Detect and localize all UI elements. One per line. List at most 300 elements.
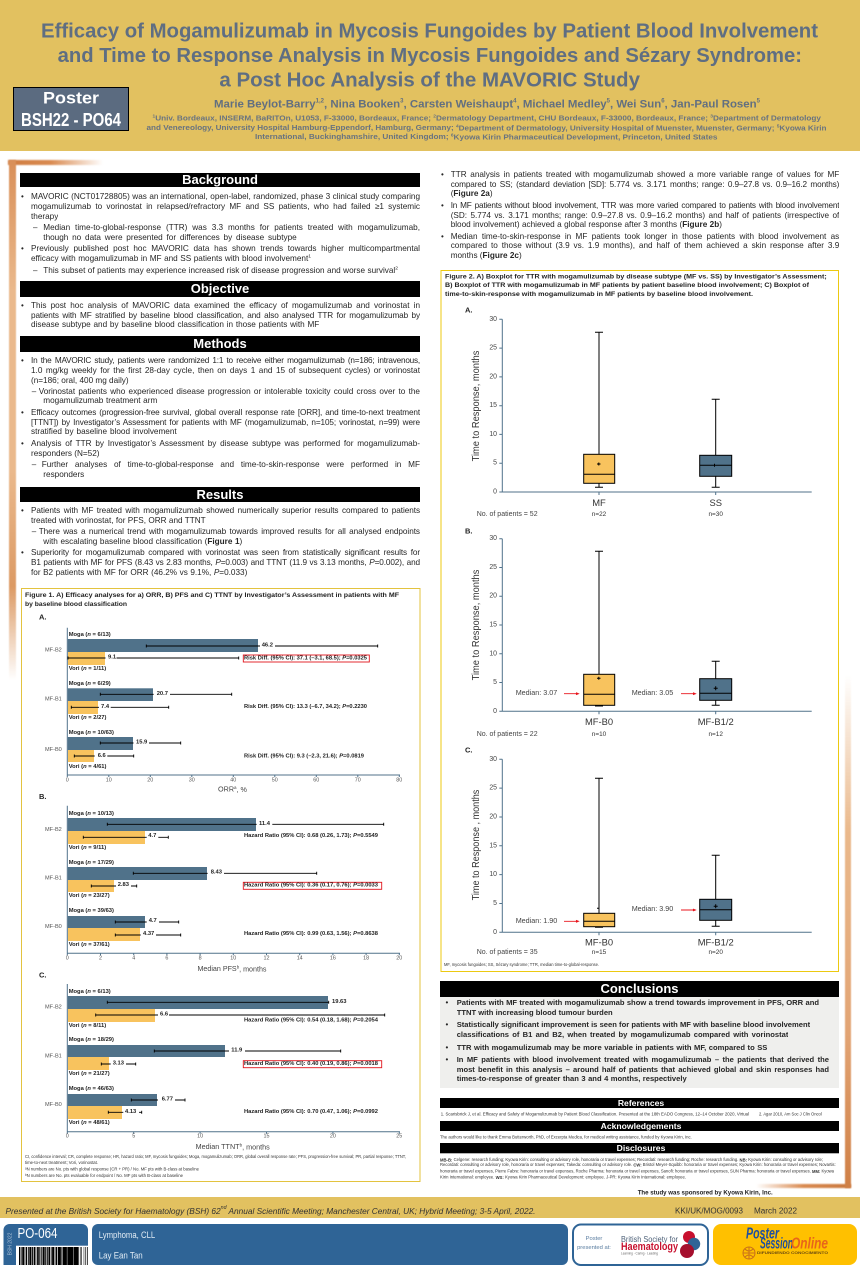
text: results: for B2 patients with MF for ORR (46.2% vs 9.1%, P=0.033) xyxy=(31,568,247,577)
group: MF-B1 TTNT: Hazard Ratio (95% CI): 0.40 (0.19, 0.86); P=0.0018 xyxy=(244,1061,379,1067)
callout: median 1.90: Median: 1.90 xyxy=(516,916,557,925)
BSH logo tile: Poster xyxy=(586,1236,602,1242)
chart B: PFS: 4 xyxy=(132,956,135,962)
text: objective xyxy=(21,301,420,329)
group: MF-B0 PFS: 4.37 xyxy=(143,931,154,937)
footer banner: Presented at the British Society for Haematology (BSH) 62 xyxy=(6,1206,229,1216)
BSH logo tile: Haematology xyxy=(621,1241,679,1253)
group: MF-B1 ORR xyxy=(45,681,367,721)
group: MF-B2 PFS xyxy=(45,811,384,851)
text: results: with escalating baseline blood classification (Figure 1) xyxy=(43,537,242,546)
text: results continued xyxy=(441,170,839,260)
text: methods: Efficacy outcomes (progression-free survival, global overall response rate [ORR], and time-to-next treatment xyxy=(31,408,420,417)
BSH logo tile: British Society for xyxy=(621,1234,678,1244)
boxplot B: 20 xyxy=(489,593,497,600)
figure 1 footnotes: ᵃN numbers are No. pts with global response (CR + PR) / No. MF pts with B-class at baseline xyxy=(25,1166,199,1172)
box: MF-B1/2 skin: n=20 xyxy=(708,949,723,956)
group: MF-B1 PFS: 8.43 xyxy=(211,870,223,876)
text: methods: • xyxy=(21,408,24,417)
text: results continued: • xyxy=(441,232,444,241)
affiliations: International, Buckinghamshire, United Kingdom; xyxy=(255,132,434,141)
group: MF-B2 PFS: 11.4 xyxy=(259,821,271,827)
text: background: efficacy with mogamulizumab in MF and SS patients with blood involvement1 xyxy=(31,254,311,263)
group: MF-B0 TTNT: 4.13 xyxy=(125,1109,137,1115)
boxplot C: 20 xyxy=(489,814,497,820)
text: methods: mogamulizumab treatment arm xyxy=(43,396,157,405)
text: background: Median time-to-global-response (TTR) was 3.3 months for patients treated with mogamulizumab, xyxy=(43,223,420,232)
group: MF-B2 PFS: 4.7 xyxy=(148,833,156,839)
session tile xyxy=(92,1224,568,1265)
acknowledgements: The authors would like to thank Emma Butterworth, PhD, of Excerpta Medica, for medical writing assistance, funded by Kyowa Kirin, Inc. xyxy=(440,1134,692,1140)
chart B: PFS xyxy=(39,792,402,973)
boxplot B: 10 xyxy=(489,650,497,657)
text: results continued: compared to SS; (standard deviation [SD]: 5.774 vs. 3.171 months; range: 0.9–27.8 vs. 0.9–16.2 months) xyxy=(451,180,839,189)
boxplot C: 0 xyxy=(493,929,497,936)
authors: , Jan-Paul Rosen xyxy=(665,98,757,110)
boxplot C: Time to Response , months xyxy=(471,790,482,900)
footer banner: nd xyxy=(221,1205,227,1211)
callout: median 3.07: Median: 3.07 xyxy=(516,688,557,697)
boxplot B: B. xyxy=(465,526,472,536)
text: background: therapy xyxy=(31,212,58,221)
text: results: Superiority for mogamulizumab compared with vorinostat was seen from statistically significant results for xyxy=(31,548,420,557)
figure 1 footnotes xyxy=(25,1154,406,1178)
text: results continued: compared to those without (3.9 vs. 1.9 months), and half of them achieved a skin response after 3.9 xyxy=(451,241,839,250)
group: MF-B2 TTNT: 6.6 xyxy=(160,1012,169,1018)
chart A: ORR: 60 xyxy=(313,778,319,784)
text: results continued: months (Figure 2c) xyxy=(451,251,522,260)
Poster Session Online logo tile: DIFUNDIENDO CONOCIMIENTO xyxy=(757,1251,828,1255)
group: MF-B0 TTNT: Vori (n = 48/61) xyxy=(69,1120,110,1126)
group: MF-B1 PFS: 2.83 xyxy=(118,882,130,888)
chart A: ORR: , % xyxy=(237,784,248,794)
group: MF-B0 PFS: Moga (n = 39/63) xyxy=(69,908,114,914)
text: objective: patients with MF stratified by baseline blood classification, and also analysed TTR for mogamulizumab by xyxy=(31,311,420,320)
box: SS: n=30 xyxy=(708,511,723,518)
poster ID tile with barcode: PO-064 xyxy=(18,1225,58,1242)
boxplot C xyxy=(465,746,812,956)
disclosures xyxy=(440,1143,839,1180)
affiliations: and Venereology, University Hospital Hamburg-Eppendorf, Hamburg, Germany; xyxy=(146,123,433,132)
BSH logo tile: Learning · Caring · Leading xyxy=(621,1252,658,1256)
chart A: ORR: 10 xyxy=(106,778,112,784)
footer banner: Annual Scientific Meeting; Manchester Central, UK; Hybrid Meeting; 3-5 April, 2022. xyxy=(227,1206,535,1216)
boxplot A: 20 xyxy=(489,373,497,380)
group: MF-B1 PFS xyxy=(45,860,382,899)
chart C: TTNT: 0 xyxy=(66,1134,69,1140)
Poster Session Online logo tile: Poster xyxy=(746,1226,780,1242)
group: MF-B2 ORR: 46.2 xyxy=(262,642,273,648)
conclusions text: Statistically significant improvement is seen for patients with MF with baseline blood involvement xyxy=(457,1020,810,1029)
text: background: This subset of patients may experience increased risk of disease progression and worse survival2 xyxy=(43,266,398,275)
chart B: PFS: 18 xyxy=(363,956,369,962)
BSH logo tile: presented at: xyxy=(577,1245,611,1251)
text: methods: [TTNT]) by Investigator’s Assessment for patients with MF (mogamulizumab, n=105; vorinostat, n=99) were xyxy=(31,418,420,427)
boxplot A xyxy=(465,306,812,518)
chart C: TTNT: Median TTNT xyxy=(196,1142,240,1151)
box: MF xyxy=(584,332,615,518)
group: MF-B0 ORR: Moga (n = 10/63) xyxy=(69,730,114,736)
group: MF-B2 ORR xyxy=(45,632,378,672)
text: results continued: In MF patients without blood involvement, TTR was more varied compared to patients with blood involvement xyxy=(451,201,839,210)
figure 1 caption xyxy=(25,592,399,608)
group: MF-B2 TTNT: Vori (n = 8/11) xyxy=(69,1023,106,1029)
chart B: PFS: , months xyxy=(239,964,267,973)
group: MF-B1 ORR: 7.4 xyxy=(101,704,110,710)
group: MF-B2 PFS: Hazard Ratio (95% CI): 0.68 (0.26, 1.73); P=0.5549 xyxy=(244,833,379,839)
conclusions text: classifications of B1 and B2, when treated by mogamulizumab compared with vorinostat xyxy=(457,1030,788,1039)
conclusions text: • xyxy=(446,1043,448,1052)
affiliations: 6 xyxy=(451,132,454,137)
boxplot A: 10 xyxy=(489,431,497,438)
group: MF-B2 ORR: MF-B2 xyxy=(45,648,62,654)
boxplot C: No. of patients = 35 xyxy=(477,949,538,956)
group: MF-B2 PFS: Vori (n = 9/11) xyxy=(69,845,106,851)
Poster Session Online logo tile: Session xyxy=(760,1236,793,1252)
text: methods: • xyxy=(21,439,24,448)
figure 2 caption: B) Boxplot of TTR with mogamulizumab in MF patients by patient baseline blood involvement; C) Boxplot of xyxy=(445,282,810,289)
authors: , Wei Sun xyxy=(610,98,661,110)
heading: conclusions xyxy=(440,981,839,997)
group: MF-B0 ORR: Vori (n = 4/61) xyxy=(69,764,107,770)
footer banner xyxy=(0,1197,860,1218)
heading: methods: Methods xyxy=(193,336,247,351)
group: MF-B2 TTNT: Hazard Ratio (95% CI): 0.54 (0.18, 1.68); P=0.2054 xyxy=(244,1018,379,1024)
boxplot C: 5 xyxy=(493,900,497,907)
callout: median 3.90 xyxy=(632,904,696,913)
box: MF-B1/2: MF-B1/2 xyxy=(698,716,734,727)
boxplot A: 0 xyxy=(493,488,497,496)
chart B: PFS: 14 xyxy=(297,956,303,962)
conclusions text xyxy=(446,998,829,1083)
boxplot B: 15 xyxy=(489,622,497,628)
group: MF-B0 PFS xyxy=(45,908,379,948)
heading: background xyxy=(20,173,420,187)
chart C: TTNT xyxy=(39,970,402,1151)
text: methods: responders (N=52) xyxy=(31,449,100,458)
group: MF-B2 ORR: Vori (n = 1/11) xyxy=(69,666,106,672)
boxplot B: Time to Response, months xyxy=(471,570,482,680)
figure 2 footnote: MF, mycosis fungoides; SS, Sézary syndrome; TTR, median time-to-global-response. xyxy=(444,962,599,967)
text: results continued: Median time-to-skin-response in MF patients took longer in those patients with blood involvement as xyxy=(451,232,839,241)
references: References xyxy=(618,1098,664,1108)
group: MF-B2 ORR: Risk Diff. (95% CI): 37.1 (–3.1, 68.5); P=0.0325 xyxy=(244,656,368,662)
text: results continued: • xyxy=(441,170,444,179)
boxplot A: 5 xyxy=(493,460,497,467)
group: MF-B1 PFS: MF-B1 xyxy=(45,876,62,882)
group: MF-B2 ORR: Moga (n = 6/13) xyxy=(69,632,111,638)
disclosures: honoraria or travel expenses, Pierre Fabre: honoraria or travel expenses, Roche Pharma: honoraria or travel expenses, Sanofi: honoraria or travel expenses, SUN Pharma: honoraria or travel expenses. MM: Kyowa xyxy=(440,1168,834,1174)
heading: results xyxy=(20,487,420,502)
header banner xyxy=(0,0,860,151)
session tile: Lay Ean Tan xyxy=(99,1250,143,1260)
chart C: TTNT: b xyxy=(240,1142,243,1147)
text: results: B1 patients with MF for PFS (8.43 vs 2.83 months, P=0.003) and TTNT (11.9 vs 3.13 months, P=0.002), and xyxy=(31,558,420,567)
panel: figure 2 xyxy=(440,270,839,972)
group: MF-B2 PFS: MF-B2 xyxy=(45,827,62,833)
text: methods: Analysis of TTR by Investigator’s Assessment by disease subtype was performed for mogamulizumab- xyxy=(31,439,420,448)
chart A: ORR: 30 xyxy=(189,778,195,784)
box: MF-B1/2 xyxy=(698,661,734,738)
icon: globe xyxy=(743,1247,755,1259)
affiliations: Kyowa Kirin xyxy=(779,123,827,132)
conclusions text: times-to-response of greater than 3 and 4 months, respectively xyxy=(457,1074,687,1083)
text: background: though no data were presented for differences by disease subtype xyxy=(43,233,297,242)
text: results continued: • xyxy=(441,201,444,210)
conclusions text: In MF patients with blood involvement treated with mogamulizumab – the patients that derived the xyxy=(457,1055,829,1064)
boxplot C: 25 xyxy=(489,785,497,792)
text: results: treated with vorinostat, for PFS, ORR and TTNT xyxy=(31,516,206,525)
conclusions text: most benefit in this analysis – around half of patients that achieved global and skin responses had xyxy=(457,1065,829,1074)
disclosures: Kirin International: employee. WS: Kyowa Kirin Pharmaceutical Development: employee. J-PR: Kyowa Kirin International: employee. xyxy=(440,1174,686,1180)
chart B: PFS: 10 xyxy=(230,956,236,962)
text: methods: In the MAVORIC study, patients were randomized 1:1 to receive either mogamulizumab (n=186; intravenous, xyxy=(31,356,420,365)
conclusions text: Patients with MF treated with mogamulizumab show a trend towards improvement in PFS, ORR and xyxy=(457,998,819,1007)
heading: conclusions: Conclusions xyxy=(600,981,678,996)
box: MF-B0 skin: MF-B0 xyxy=(585,936,613,948)
BSH logo tile xyxy=(573,1224,708,1265)
authors: 6 xyxy=(661,98,665,104)
disclosures: MB-B: Celgene: research funding; Kyowa Kirin: consulting or advisory role, honoraria or travel expenses; Recordati: research funding; Roche: research funding. NB: Kyowa Kirin: consulting or advisory role; xyxy=(440,1157,823,1162)
callout: median 3.05 xyxy=(632,688,696,697)
references, acknowledgements and disclosures xyxy=(440,1098,839,1196)
affiliations: Univ. Bordeaux, INSERM, BaRITOn, U1053, F-33000, Bordeaux, France; xyxy=(155,113,433,122)
text: background: – xyxy=(33,223,37,232)
boxplot A: 15 xyxy=(489,402,497,409)
group: MF-B0 ORR: 6.6 xyxy=(98,753,107,759)
group: MF-B1 TTNT xyxy=(45,1037,382,1077)
figure 1 footnotes: ᵇN numbers are No. pts evaluable for endpoint / No. MF pts with B-class at baseline xyxy=(25,1173,183,1178)
group: MF-B0 TTNT: Hazard Ratio (95% CI): 0.70 (0.47, 1.06); P=0.0992 xyxy=(244,1109,378,1115)
group: MF-B1 TTNT: Moga (n = 18/29) xyxy=(69,1037,114,1043)
disclosures: Disclosures xyxy=(617,1143,666,1153)
affiliations: Kyowa Kirin Pharmaceutical Development, Princeton, United States xyxy=(454,132,718,141)
chart B: PFS: 16 xyxy=(330,956,336,962)
group: MF-B1 TTNT: 3.13 xyxy=(113,1060,125,1066)
box: MF-B0: n=10 xyxy=(592,731,607,738)
chart A: ORR: 70 xyxy=(355,778,361,784)
figure 2 caption: time-to-skin-response with mogamulizumab in MF patients by baseline blood involvement. xyxy=(445,291,753,298)
chart A: ORR: 40 xyxy=(230,778,236,784)
boxplot C: C. xyxy=(465,746,472,754)
group: MF-B2 TTNT: 19.63 xyxy=(332,999,347,1005)
group: MF-B1 TTNT: MF-B1 xyxy=(45,1054,62,1060)
poster ID tile with barcode: BSH 2022 xyxy=(7,1232,13,1255)
authors: 1,2 xyxy=(316,98,325,104)
chart A: ORR: a xyxy=(234,784,237,790)
chart B: PFS: 6 xyxy=(165,956,168,962)
chart C: TTNT: C. xyxy=(39,970,46,980)
Poster Session Online logo tile: Online xyxy=(791,1236,828,1252)
references: 1. Scarisbrick J, et al. Efficacy and Safety of Mogamulizumab by Patient Blood Classification. Presented at the 18th EADO Congress, 12–14 October 2020, Virtual xyxy=(441,1112,749,1116)
chart A: ORR: 50 xyxy=(272,778,278,784)
group: MF-B1 ORR: Moga (n = 6/29) xyxy=(69,681,111,687)
text: methods: (n=186; oral, 400 mg daily) xyxy=(31,376,129,385)
text: background: – xyxy=(33,266,37,275)
figure 1 caption: by baseline blood classification xyxy=(25,601,127,608)
poster number badge: BSH22 - PO64 xyxy=(21,110,121,130)
panel: conclusions xyxy=(440,981,839,1088)
group: MF-B1 ORR: MF-B1 xyxy=(45,697,62,703)
conclusions text: • xyxy=(446,1020,448,1029)
acknowledgements xyxy=(440,1121,839,1140)
text: methods: • xyxy=(21,356,24,365)
affiliations xyxy=(146,113,827,141)
box: MF-B0: MF-B0 xyxy=(585,716,613,727)
authors: 5 xyxy=(607,98,611,104)
title: Efficacy of Mogamulizumab in Mycosis Fungoides by Patient Blood Involvement xyxy=(41,20,818,42)
chart C: TTNT: 25 xyxy=(396,1134,402,1140)
chart A: ORR: 80 xyxy=(396,778,402,784)
boxplot A: No. of patients = 52 xyxy=(477,511,538,518)
chart C: TTNT: 20 xyxy=(330,1134,336,1140)
group: MF-B0 TTNT: MF-B0 xyxy=(45,1102,62,1108)
boxplot B: 25 xyxy=(489,564,497,571)
authors: , Nina Booken xyxy=(324,98,400,110)
acknowledgements: Acknowledgements xyxy=(601,1121,682,1131)
chart A: ORR: A. xyxy=(39,612,46,622)
text: background: MAVORIC (NCT01728805) was an international, open-label, randomized, phase 3 clinical study comparing xyxy=(31,192,420,201)
footer banner: KKI/UK/MOG/0093 xyxy=(675,1206,744,1216)
text: background: • xyxy=(21,244,24,253)
group: MF-B0 ORR xyxy=(45,730,365,770)
conclusions text: • xyxy=(446,998,448,1007)
conclusions text: TTR with mogamulizumab may be more variable in patients with MF, compared to SS xyxy=(457,1043,767,1052)
heading: methods xyxy=(20,336,420,352)
chart B: PFS: B. xyxy=(39,792,46,801)
text: results continued: (SD: 5.774 vs. 3.171 months; range: 0.9–27.8 vs. 0.9–16.2 months) and half of patients (irrespective of xyxy=(451,211,839,220)
session tile: Lymphoma, CLL xyxy=(99,1230,155,1240)
text: objective: • xyxy=(21,301,24,310)
callout: median 1.90 xyxy=(516,916,578,925)
icon: BSH circles xyxy=(680,1231,700,1258)
disclosures: Recordati: consulting or advisory role, honoraria or travel expenses; Takeda: consulting or advisory role. CW: Bristol Meyer-Squibb: honoraria or travel expenses; Kyowa Kirin: honoraria or travel expenses; Novartis: xyxy=(440,1162,836,1167)
group: MF-B1 ORR: 20.7 xyxy=(157,691,168,697)
affiliations: 5 xyxy=(777,123,780,128)
text: results xyxy=(21,506,420,577)
group: MF-B2 TTNT xyxy=(45,989,385,1029)
authors: , Michael Medley xyxy=(516,98,607,110)
chart A: ORR xyxy=(39,612,402,794)
chart C: TTNT: 15 xyxy=(264,1134,270,1140)
callout: median 3.90: Median: 3.90 xyxy=(632,904,673,913)
group: MF-B1 PFS: Vori (n = 23/27) xyxy=(69,893,110,899)
chart B: PFS: 20 xyxy=(396,956,402,962)
affiliations: 3 xyxy=(710,113,714,118)
chart C: TTNT: 10 xyxy=(197,1134,203,1140)
group: MF-B1 PFS: Moga (n = 17/29) xyxy=(69,860,114,866)
group: MF-B1 ORR: Risk Diff. (95% CI): 13.3 (–6.7, 34.2); P=0.2230 xyxy=(244,704,367,710)
box: MF-B0 skin xyxy=(584,778,615,956)
text: methods: Further analyses of time-to-global-response and time-to-skin-response were performed in MF xyxy=(42,460,420,469)
affiliations: 4 xyxy=(456,123,459,128)
boxplot B: 5 xyxy=(493,679,497,686)
title: a Post Hoc Analysis of the MAVORIC Study xyxy=(219,68,641,92)
boxplot B: 0 xyxy=(493,708,497,715)
affiliations: Department of Dermatology, University Hospital of Muenster, Muenster, Germany; xyxy=(459,123,777,132)
text: methods: responders xyxy=(43,470,84,479)
group: MF-B0 PFS: Vori (n = 37/61) xyxy=(69,942,110,948)
box: MF: MF xyxy=(592,497,606,508)
poster number badge: Poster xyxy=(43,88,99,108)
box: SS xyxy=(700,399,732,518)
text: objective: disease subtype and by baseline blood classification in those patients with MF xyxy=(31,320,319,329)
text: results: – xyxy=(32,527,36,536)
group: MF-B0 PFS: Hazard Ratio (95% CI): 0.99 (0.63, 1.56); P=0.8638 xyxy=(244,931,379,937)
title: and Time to Response Analysis in Mycosis Fungoides and Sézary Syndrome: xyxy=(58,44,802,67)
figure 1 footnotes: time-to-next treatment; Vori, vorinostat. xyxy=(25,1160,98,1165)
poster number badge xyxy=(14,88,128,130)
text: results: There was a numerical trend with mogamulizumab towards improved results for all analysed endpoints xyxy=(39,527,420,536)
boxplot B: 30 xyxy=(489,535,497,542)
text: background: Previously published post hoc MAVORIC data has shown trends towards higher multicompartmental xyxy=(31,244,420,253)
box: MF-B1/2: n=12 xyxy=(708,731,723,738)
bottom strip xyxy=(4,1224,857,1266)
text: methods: stratified by baseline blood involvement xyxy=(31,427,177,436)
group: MF-B2 TTNT: Moga (n = 6/13) xyxy=(69,989,111,995)
references xyxy=(440,1098,839,1116)
callout: median 3.05: Median: 3.05 xyxy=(632,688,673,697)
group: MF-B0 TTNT: Moga (n = 46/63) xyxy=(69,1086,114,1092)
text: objective: This post hoc analysis of MAVORIC data examined the efficacy of mogamulizumab and vorinostat in xyxy=(31,301,420,310)
box: MF-B0 xyxy=(584,551,615,738)
chart B: PFS: 8 xyxy=(199,956,202,962)
text: methods xyxy=(21,356,420,479)
boxplot A: A. xyxy=(465,306,472,314)
affiliations: 2 xyxy=(433,113,437,118)
box: MF-B1/2 skin: MF-B1/2 xyxy=(698,936,734,948)
box: SS: SS xyxy=(709,497,722,508)
figure 2 caption xyxy=(445,274,827,298)
text: methods: 1.0 mg/kg weekly for the first 28-day cycle, then on days 1 and 15 of subsequent cycles) or vorinostat xyxy=(31,366,420,375)
group: MF-B2 ORR: 9.1 xyxy=(108,654,117,660)
boxplot B: No. of patients = 22 xyxy=(477,731,538,738)
authors: Marie Beylot-Barry xyxy=(214,98,315,110)
text: results: Patients with MF treated with mogamulizumab showed numerically superior results compared to patients xyxy=(31,506,420,515)
boxplot C: 15 xyxy=(489,842,497,849)
sponsor note: The study was sponsored by Kyowa Kirin, Inc. xyxy=(638,1190,773,1196)
group: MF-B0 ORR: MF-B0 xyxy=(45,747,62,753)
panel: figure 1 xyxy=(21,588,420,1182)
text: results: • xyxy=(21,506,24,515)
text: background: mogamulizumab to vorinostat in relapsed/refractory MF and SS patients, who had failed ≥1 systemic xyxy=(31,202,420,211)
text: background xyxy=(21,192,420,275)
text: methods: Vorinostat patients who experienced disease progression or intolerable toxicity could cross over to the xyxy=(39,387,420,396)
group: MF-B1 TTNT: Vori (n = 21/27) xyxy=(69,1071,110,1077)
affiliations: Dermatology Department, CHU Bordeaux, F-33000, Bordeaux, France; xyxy=(436,113,710,122)
authors: 4 xyxy=(513,98,517,104)
box: MF: n=22 xyxy=(592,511,607,518)
figure 1 footnotes: CI, confidence interval; CR, complete response; HR, hazard ratio; MF, mycosis fungoides; Moga, mogamulizumab; ORR, global overall response rate; PFS, progression-free survival; PR, partial response; TTNT, xyxy=(25,1154,406,1159)
group: MF-B2 TTNT: MF-B2 xyxy=(45,1005,62,1011)
authors: 5 xyxy=(757,98,761,104)
chart C: TTNT: 5 xyxy=(132,1134,135,1140)
boxplot C: 10 xyxy=(489,871,497,878)
boxplot A: 25 xyxy=(489,345,497,352)
text: methods: – xyxy=(32,387,36,396)
affiliations: Department of Dermatology xyxy=(713,113,822,122)
group: MF-B0 PFS: MF-B0 xyxy=(45,924,62,930)
chart B: PFS: Median PFS xyxy=(198,964,237,973)
authors: , Carsten Weishaupt xyxy=(404,98,513,110)
text: results: • xyxy=(21,548,24,557)
boxplot A: 30 xyxy=(489,316,497,323)
conclusions text: TTNT with increasing blood tumour burden xyxy=(457,1008,613,1017)
callout: median 3.07 xyxy=(516,688,578,697)
group: MF-B0 PFS: 4.7 xyxy=(149,918,157,924)
Poster Session Online logo tile xyxy=(713,1224,857,1265)
group: MF-B1 ORR: Vori (n = 2/27) xyxy=(69,715,107,721)
